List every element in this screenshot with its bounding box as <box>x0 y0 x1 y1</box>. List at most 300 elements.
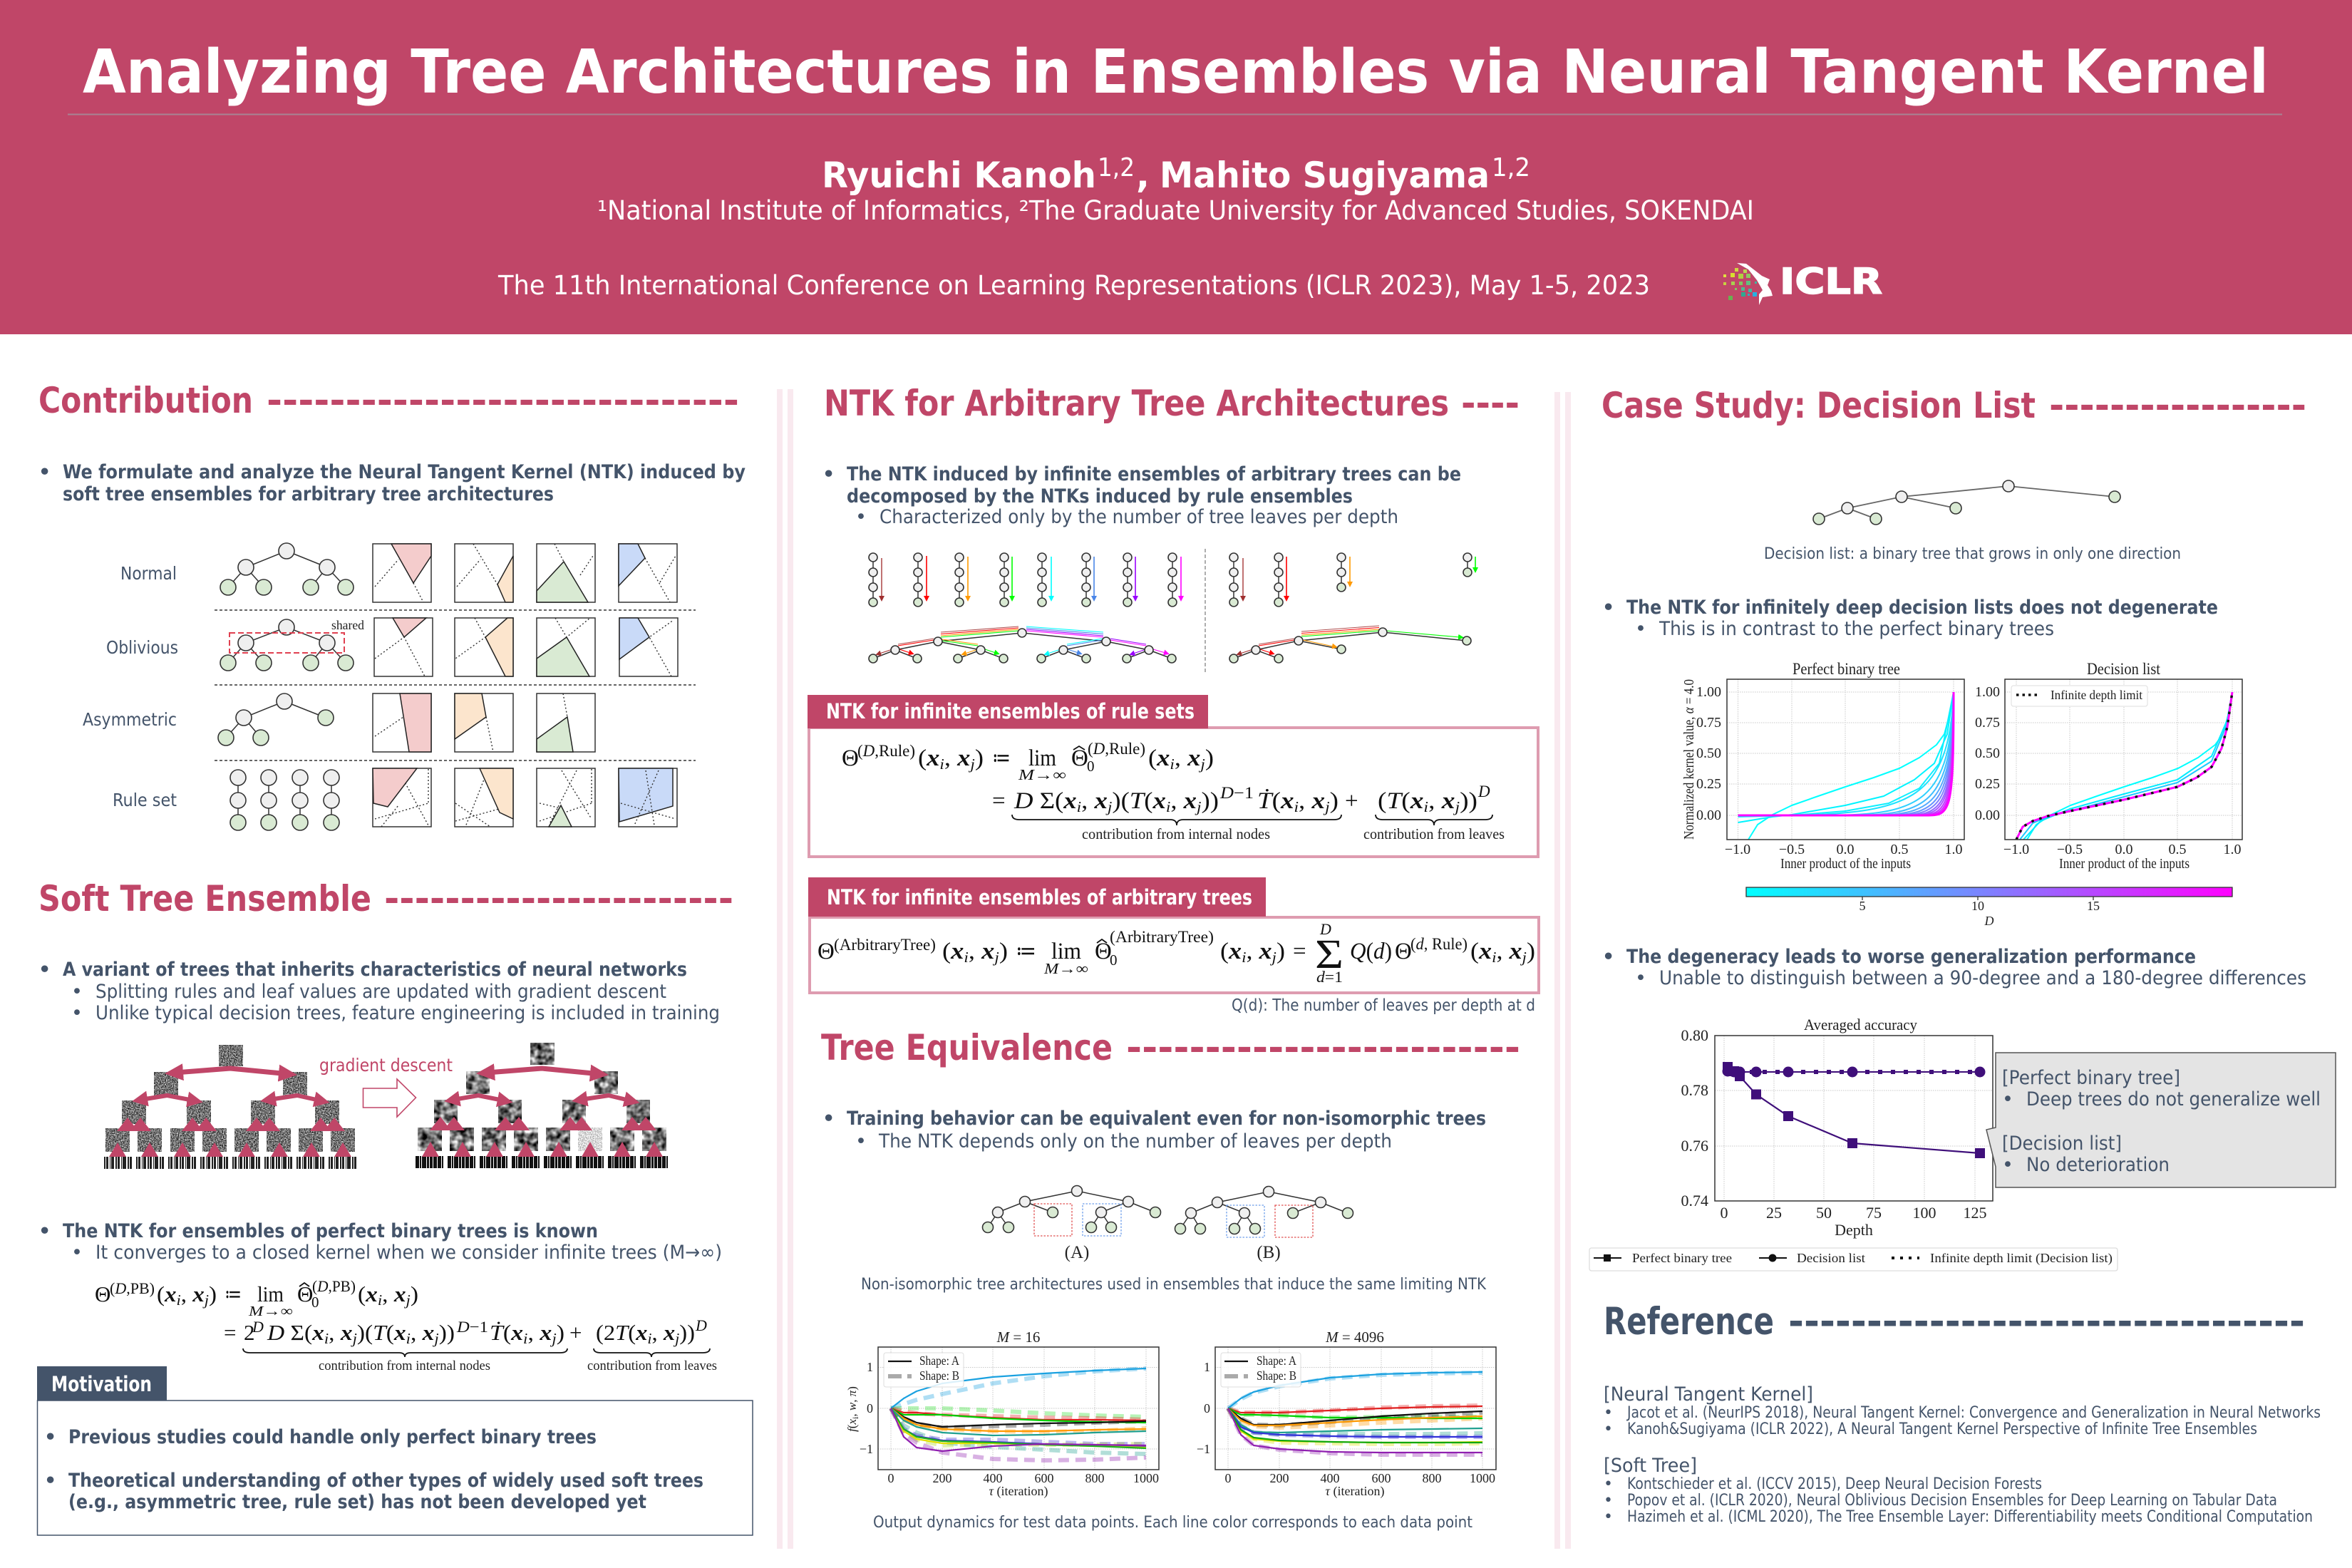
contribution statement <box>38 461 746 505</box>
chart: output dynamics M=4096: 600 <box>1371 1471 1391 1485</box>
formula: arbitrary tree NTK: i <box>1492 949 1497 966</box>
chart: output dynamics M=16: , <box>845 1410 859 1417</box>
formula: arbitrary tree NTK: = <box>1293 939 1306 964</box>
formula: rule set NTK: )) <box>1460 788 1477 814</box>
formula: arbitrary tree NTK: Θ <box>1095 939 1112 964</box>
authors: 1,2 <box>1098 153 1135 182</box>
formula: arbitrary tree NTK: 0 <box>1110 951 1118 969</box>
chart: averaged accuracy: 0.76 <box>1681 1137 1708 1155</box>
formula: rule set NTK: 0 <box>1087 758 1095 775</box>
chart: decision list kernel: Infinite depth limit <box>2051 688 2142 702</box>
affiliations: ¹National Institute of Informatics, ²The Graduate University for Advanced Studies, SOKENDAI <box>597 195 1754 226</box>
chart: decision list kernel: 0.0 <box>2115 842 2132 857</box>
chart: output dynamics M=16: M = 16 <box>996 1329 1040 1346</box>
header banner <box>0 0 2352 334</box>
formula: arbitrary tree NTK: j <box>1269 949 1276 966</box>
chart: averaged accuracy: 0.74 <box>1681 1192 1708 1209</box>
formula: rule set NTK: j <box>1323 798 1330 815</box>
chart: output dynamics M=4096: 400 <box>1320 1471 1340 1485</box>
chart: averaged accuracy: 125 <box>1963 1204 1987 1222</box>
formula: perfect binary tree NTK: M→∞ <box>248 1304 293 1319</box>
formula: arbitrary tree NTK: Σ <box>1315 931 1343 977</box>
formula: arbitrary tree NTK <box>817 920 1535 986</box>
bullets: decomposition: The NTK induced by infinite ensembles of arbitrary trees can be <box>847 463 1461 485</box>
contribution statement: • <box>38 461 51 483</box>
formula: rule set NTK: (D,Rule) <box>1088 740 1145 758</box>
figure: tree types and partitions: Asymmetric <box>83 709 177 730</box>
formula: perfect binary tree NTK: Ṫ(x <box>490 1320 522 1345</box>
heading: contribution <box>38 380 739 421</box>
formula: arbitrary tree NTK: i <box>1242 949 1247 966</box>
formula: rule set NTK: + <box>1345 788 1358 814</box>
tab: arbitrary trees: NTK for infinite ensembles of arbitrary trees <box>827 885 1252 909</box>
formula: arbitrary tree NTK: ) <box>999 939 1008 964</box>
contribution statement: We formulate and analyze the Neural Tangent Kernel (NTK) induced by <box>63 461 746 483</box>
formula: rule set NTK: (x <box>918 746 939 771</box>
formula: rule set NTK: x <box>1441 788 1455 814</box>
formula: rule set NTK: j <box>1195 798 1202 815</box>
chart: output dynamics M=16 <box>845 1329 1159 1499</box>
formula: perfect binary tree NTK: D Σ(x <box>267 1320 324 1345</box>
partitions: asymmetric row <box>373 693 595 752</box>
formula: rule set NTK: , <box>1170 788 1184 814</box>
tree: asymmetric <box>218 693 334 746</box>
colorbar: depth D: 10 <box>1971 899 1984 913</box>
panel: contribution <box>38 380 746 830</box>
heading: tree equivalence: ------------------------- <box>1126 1027 1520 1068</box>
formula: perfect binary tree NTK: + <box>569 1320 582 1345</box>
formula: perfect binary tree NTK: j <box>350 1330 357 1347</box>
references: neural tangent kernel <box>1604 1383 2321 1438</box>
formula: perfect binary tree NTK: )) <box>679 1320 695 1345</box>
formula: rule set NTK: i <box>1170 755 1175 773</box>
motivation bullets: Theoretical understanding of other types of widely used soft trees <box>68 1470 703 1492</box>
rule chains: decision list <box>1229 553 1475 607</box>
legend: accuracy chart <box>1589 1248 2118 1271</box>
chart: perfect binary tree kernel: −0.5 <box>1779 842 1805 857</box>
tree: oblivious: shared <box>331 618 364 632</box>
formula: arbitrary tree NTK: Q(d) <box>1350 939 1392 964</box>
formula: perfect binary tree NTK <box>95 1277 717 1373</box>
chart: decision list kernel: −0.5 <box>2057 842 2083 857</box>
chart: output dynamics M=4096: Shape: B <box>1257 1368 1296 1383</box>
formula: perfect binary tree NTK: 2 <box>244 1320 255 1345</box>
formula: perfect binary tree NTK: , <box>329 1320 341 1345</box>
formula: rule set NTK: Ṫ(x <box>1257 788 1292 814</box>
chart: averaged accuracy: Depth <box>1835 1221 1873 1239</box>
formula: perfect binary tree NTK: )( <box>357 1320 373 1345</box>
chart: output dynamics M=4096: M = 4096 <box>1325 1329 1384 1346</box>
bullets: soft tree definition: A variant of trees that inherits characteristics of neural networks <box>63 959 687 981</box>
chart: output dynamics M=16: τ (iteration) <box>989 1484 1048 1499</box>
formula: arbitrary tree NTK: (d, Rule) <box>1410 935 1468 953</box>
panel: NTK for arbitrary tree architectures <box>808 383 1539 1015</box>
formula: perfect binary tree NTK: j <box>432 1330 439 1347</box>
formula: arbitrary tree NTK: x <box>981 939 994 964</box>
chart: averaged accuracy: 0 <box>1721 1204 1728 1222</box>
formula: rule set NTK: contribution from leaves <box>1363 825 1505 842</box>
formula: rule set NTK: ) <box>975 746 984 771</box>
formula: perfect binary tree NTK: Θ <box>297 1281 313 1306</box>
chart: perfect binary tree kernel: 0.25 <box>1696 776 1721 792</box>
authors: Ryuichi Kanoh <box>822 155 1096 196</box>
chart: averaged accuracy: 25 <box>1766 1204 1782 1222</box>
bullets: known NTK <box>38 1220 722 1264</box>
formula: rule set NTK: x <box>1183 788 1197 814</box>
chart: output dynamics M=16: 800 <box>1085 1471 1105 1485</box>
formula: perfect binary tree NTK: (D,PB) <box>312 1277 356 1295</box>
formula: arbitrary tree NTK: x <box>1258 939 1272 964</box>
chart: output dynamics M=16: Shape: A <box>919 1353 959 1368</box>
formula: rule set NTK: j <box>1453 798 1460 815</box>
motivation bullets: (e.g., asymmetric tree, rule set) has not been developed yet <box>68 1491 646 1513</box>
chart: averaged accuracy: 100 <box>1913 1204 1936 1222</box>
formula: rule set NTK: (T(x <box>1378 788 1422 814</box>
bullets: known NTK: It converges to a closed kernel when we consider infinite trees (M→∞) <box>96 1242 722 1264</box>
chart: perfect binary tree kernel: 1.00 <box>1696 684 1721 700</box>
panel: motivation <box>37 1366 753 1535</box>
chart: output dynamics M=4096: −1 <box>1197 1442 1210 1456</box>
formula: perfect binary tree NTK: , <box>652 1320 664 1345</box>
formula: arbitrary tree NTK: (ArbitraryTree) <box>834 936 936 954</box>
figure: tree A <box>982 1186 1160 1262</box>
formula: rule set NTK: i <box>1294 798 1299 815</box>
heading: tree equivalence: Tree Equivalence <box>821 1027 1113 1068</box>
conference line: The 11th International Conference on Learning Representations (ICLR 2023), May 1-5, 2023 <box>497 270 1650 301</box>
chart: averaged accuracy: 0.78 <box>1681 1081 1708 1099</box>
references: neural tangent kernel: • <box>1604 1420 1613 1438</box>
heading: contribution: Contribution <box>38 380 253 421</box>
caption: decision list: Decision list: a binary tree that grows in only one direction <box>1764 545 2181 563</box>
bullets: soft tree definition <box>38 959 720 1024</box>
figure: random tree filters before training <box>104 1045 357 1163</box>
chart: output dynamics M=4096 <box>1197 1329 1496 1499</box>
chart: output dynamics M=4096: 1 <box>1204 1360 1210 1374</box>
bullets: generalization: Unable to distinguish between a 90-degree and a 180-degree differences <box>1659 967 2306 989</box>
formula: perfect binary tree NTK: contribution from internal nodes <box>319 1358 490 1373</box>
caption: output dynamics: Output dynamics for test data points. Each line color corresponds to each data point <box>873 1514 1472 1532</box>
chart: decision list kernel <box>1975 660 2242 872</box>
bullets: soft tree definition: Splitting rules and leaf values are updated with gradient descent <box>96 981 666 1003</box>
formula: perfect binary tree NTK: 0 <box>311 1294 319 1311</box>
formula: perfect binary tree NTK: D−1 <box>456 1318 488 1336</box>
chart: decision list kernel: 1.0 <box>2224 842 2241 857</box>
bullets: equivalence: • <box>855 1130 867 1152</box>
heading: soft tree ensemble <box>38 878 733 919</box>
panel: NTK for arbitrary trees <box>808 877 1539 1015</box>
chart: perfect binary tree kernel: Inner product of the inputs <box>1780 856 1911 872</box>
authors: Mahito Sugiyama <box>1160 155 1490 196</box>
partitions: rule set row <box>373 768 677 827</box>
formula: perfect binary tree NTK: ) <box>209 1281 217 1306</box>
formula: rule set NTK: D Σ(x <box>1014 788 1076 814</box>
formula: perfect binary tree NTK: , <box>527 1320 540 1345</box>
references: soft tree <box>1604 1455 2313 1526</box>
bullets: no degeneration: • <box>1602 597 1614 619</box>
authors: 1,2 <box>1492 153 1530 182</box>
formula: arbitrary tree NTK: x <box>1508 939 1522 964</box>
chart: perfect binary tree kernel: −1.0 <box>1725 842 1750 857</box>
chart: output dynamics M=16: 1000 <box>1133 1471 1159 1485</box>
bullets: soft tree definition: • <box>71 981 83 1003</box>
references: soft tree: [Soft Tree] <box>1604 1455 1697 1477</box>
formula: rule set NTK: ) <box>1205 746 1214 771</box>
panel: NTK for rule sets <box>808 695 1538 857</box>
formula: perfect binary tree NTK: , <box>382 1281 394 1306</box>
figure: tree B <box>1175 1186 1353 1262</box>
tab: rule sets: NTK for infinite ensembles of rule sets <box>826 699 1195 723</box>
panel: reference <box>1604 1300 2321 1526</box>
formula: arbitrary tree NTK: i <box>964 949 969 966</box>
chart: averaged accuracy: Averaged accuracy <box>1804 1016 1917 1033</box>
figure: tree A: (A) <box>1065 1243 1089 1262</box>
callout: accuracy interpretation: • <box>2002 1088 2013 1110</box>
chart: output dynamics M=16: 0 <box>888 1471 894 1485</box>
formula: arbitrary tree NTK: ≔ <box>1016 939 1036 964</box>
formula: rule set NTK: x <box>1093 788 1108 814</box>
formula: perfect binary tree NTK: j <box>673 1330 679 1347</box>
formula: perfect binary tree NTK: lim <box>257 1281 284 1306</box>
chart: decision list kernel: 1.00 <box>1975 684 2000 700</box>
bullets: known NTK: The NTK for ensembles of perfect binary trees is known <box>63 1220 598 1242</box>
formula: arbitrary tree NTK: j <box>992 949 999 966</box>
bullets: decomposition: Characterized only by the number of tree leaves per depth <box>880 506 1398 528</box>
panel: tree equivalence <box>821 1027 1520 1532</box>
bullets: generalization: • <box>1635 967 1646 989</box>
bullets: no degeneration <box>1602 597 2218 640</box>
arrow: training direction <box>363 1079 416 1117</box>
chart: output dynamics M=4096: 800 <box>1423 1471 1441 1485</box>
formula: perfect binary tree NTK: j <box>550 1330 557 1347</box>
heading: contribution: ------------------------------ <box>267 380 739 421</box>
tab: arbitrary trees <box>808 877 1266 917</box>
formula: perfect binary tree NTK: x <box>340 1320 353 1345</box>
formula: arbitrary tree NTK: D <box>1319 920 1331 938</box>
chart: decision list kernel: 0.5 <box>2168 842 2187 857</box>
authors <box>822 153 1530 196</box>
chart: output dynamics M=16: w, π) <box>845 1386 859 1410</box>
references: soft tree: Kontschieder et al. (ICCV 2015), Deep Neural Decision Forests <box>1627 1475 2042 1493</box>
chart: output dynamics M=4096: 200 <box>1270 1471 1289 1485</box>
motivation bullets: • <box>44 1470 56 1492</box>
formula: rule set NTK: D−1 <box>1219 784 1254 802</box>
formula: rule set NTK: , <box>1081 788 1095 814</box>
chart: averaged accuracy: 50 <box>1816 1204 1832 1222</box>
chart: output dynamics M=4096: Shape: A <box>1257 1353 1296 1368</box>
bullets: equivalence: The NTK depends only on the number of leaves per depth <box>878 1130 1392 1152</box>
motivation bullets: • <box>44 1426 56 1448</box>
formula: rule set NTK: contribution from internal nodes <box>1082 825 1270 842</box>
formula: rule set NTK: (D,Rule) <box>857 742 915 760</box>
chart: output dynamics M=16: 1 <box>867 1360 873 1374</box>
callout: accuracy interpretation: [Perfect binary tree] <box>2002 1067 2180 1089</box>
formula: rule set NTK: (x <box>1148 746 1169 771</box>
tree: rule set <box>230 770 339 830</box>
formula: arbitrary tree NTK: d=1 <box>1316 968 1343 986</box>
panel: case study decision list <box>1589 385 2336 1271</box>
colorbar: depth D: 15 <box>2087 899 2100 913</box>
chart: decision list kernel: Decision list <box>2087 660 2161 678</box>
chart: output dynamics M=16: 400 <box>984 1471 1002 1485</box>
note: Q(d): Q(d): The number of leaves per depth at d <box>1232 996 1535 1015</box>
formula: arbitrary tree NTK: Θ <box>817 939 835 964</box>
chart: perfect binary tree kernel: 1.0 <box>1944 842 1963 857</box>
motivation bullets: Previous studies could handle only perfect binary trees <box>68 1426 597 1448</box>
formula: rule set NTK: T(x <box>1130 788 1165 814</box>
bullets: generalization: • <box>1602 946 1614 968</box>
label: gradient descent: gradient descent <box>319 1055 453 1076</box>
chart: decision list kernel: 0.75 <box>1975 715 2000 731</box>
formula: perfect binary tree NTK: ≔ <box>225 1281 242 1306</box>
heading: case study: ----------------- <box>2049 385 2306 426</box>
formula: rule set NTK: , <box>1299 788 1312 814</box>
chart: averaged accuracy: 0.80 <box>1681 1026 1708 1044</box>
formula: arbitrary tree NTK: (x <box>1470 939 1491 964</box>
formula: perfect binary tree NTK: , <box>411 1320 423 1345</box>
figure: tree types and partitions <box>83 543 696 830</box>
motivation tab <box>37 1366 167 1401</box>
chart: averaged accuracy: 75 <box>1866 1204 1882 1222</box>
formula: perfect binary tree NTK: T(x <box>373 1320 405 1345</box>
chart: output dynamics M=4096: τ (iteration) <box>1326 1484 1384 1499</box>
formula: arbitrary tree NTK: j <box>1520 949 1527 966</box>
formula: rule set NTK: x <box>1187 746 1200 771</box>
formula: rule set NTK: Θ <box>842 746 859 771</box>
formula: perfect binary tree NTK: x <box>663 1320 675 1345</box>
chart: perfect binary tree kernel: Perfect binary tree <box>1793 660 1900 678</box>
caption: non-isomorphic trees: Non-isomorphic tree architectures used in ensembles that induce the same limiting NTK <box>861 1276 1487 1294</box>
bullets: soft tree definition: Unlike typical decision trees, feature engineering is included in training <box>96 1002 720 1024</box>
bullets: decomposition: • <box>822 463 835 485</box>
callout: accuracy interpretation: No deterioration <box>2026 1154 2170 1176</box>
callout: accuracy interpretation: • <box>2002 1154 2013 1176</box>
formula: perfect binary tree NTK: D <box>695 1316 707 1334</box>
decision list tree with coloured paths <box>1229 626 1471 663</box>
formula: rule set NTK: j <box>1105 798 1113 815</box>
figure: tree types and partitions: Oblivious <box>106 637 178 658</box>
chart: output dynamics M=4096: 0 <box>1224 1471 1232 1485</box>
chart: decision list kernel: 0.00 <box>1975 808 2000 823</box>
legend: accuracy chart: Decision list <box>1797 1251 1865 1265</box>
formula: rule set NTK: , <box>1428 788 1442 814</box>
formula: perfect binary tree NTK: (x <box>358 1281 377 1306</box>
tree: oblivious <box>220 618 364 671</box>
formula: rule set NTK: x <box>956 746 970 771</box>
formula: rule set NTK: )( <box>1112 788 1130 814</box>
figure: tree types and partitions: Normal <box>120 563 177 584</box>
formula: rule set NTK: Θ <box>1071 746 1088 771</box>
bullets: generalization: The degeneracy leads to worse generalization performance <box>1626 946 2196 968</box>
chart: perfect binary tree kernel: 0.0 <box>1836 842 1855 857</box>
panel: soft tree ensemble <box>37 878 753 1535</box>
callout: accuracy interpretation: [Decision list] <box>2002 1133 2122 1155</box>
contribution statement: soft tree ensembles for arbitrary tree architectures <box>63 483 554 505</box>
formula: arbitrary tree NTK: (ArbitraryTree) <box>1110 928 1214 946</box>
chart: perfect binary tree kernel: 0.00 <box>1696 808 1721 823</box>
formula: rule set NTK: j <box>968 755 975 773</box>
formula: arbitrary tree NTK: ) <box>1276 939 1285 964</box>
icon: ICLR logo: ICLR <box>1780 261 1882 302</box>
authors: , <box>1136 155 1150 196</box>
formula: perfect binary tree NTK: x <box>539 1320 552 1345</box>
bullets: known NTK: • <box>38 1220 51 1242</box>
chart: output dynamics M=16: i <box>850 1416 860 1419</box>
formula: arbitrary tree NTK: M→∞ <box>1043 960 1088 977</box>
formula: perfect binary tree NTK: i <box>523 1330 528 1347</box>
chart: output dynamics M=16: 0 <box>867 1401 873 1415</box>
chart: output dynamics M=4096: 0 <box>1204 1401 1210 1415</box>
figure: decision list tree <box>1813 480 2120 525</box>
bullets: soft tree definition: • <box>71 1002 83 1024</box>
heading: NTK for arbitrary trees: ---- <box>1461 383 1520 424</box>
chart: decision list kernel: Inner product of the inputs <box>2059 856 2189 872</box>
heading: case study: Case Study: Decision List <box>1601 385 2036 426</box>
references: soft tree: • <box>1604 1475 1613 1493</box>
chart: output dynamics M=16: −1 <box>860 1442 873 1456</box>
tab: rule sets <box>808 695 1208 728</box>
formula: arbitrary tree NTK: (x <box>1220 939 1241 964</box>
references: soft tree: • <box>1604 1492 1613 1510</box>
formula: perfect binary tree NTK: x <box>422 1320 434 1345</box>
chart: perfect binary tree kernel: 0.5 <box>1890 842 1909 857</box>
formula: arbitrary tree NTK: (x <box>942 939 963 964</box>
perfect binary tree with coloured paths <box>869 626 1176 663</box>
formula: rule set NTK: , <box>944 746 957 771</box>
figure: tree types and partitions: Rule set <box>113 790 177 810</box>
formula: rule set NTK: lim <box>1028 746 1056 771</box>
formula: rule set NTK: i <box>1423 798 1428 815</box>
formula: perfect binary tree NTK: (x <box>157 1281 176 1306</box>
bullets: no degeneration: This is in contrast to the perfect binary trees <box>1659 618 2054 640</box>
chart: output dynamics M=16: f(x <box>845 1419 859 1432</box>
formula: perfect binary tree NTK: i <box>324 1330 329 1347</box>
figure: tree B: (B) <box>1257 1243 1281 1262</box>
bullets: generalization <box>1602 946 2306 989</box>
chart: output dynamics M=16: Shape: B <box>919 1368 959 1383</box>
chart: output dynamics M=4096: 1000 <box>1470 1471 1495 1485</box>
references: neural tangent kernel: • <box>1604 1404 1613 1422</box>
formula: perfect binary tree NTK: x <box>192 1281 205 1306</box>
formula: perfect binary tree NTK: (2T(x <box>596 1320 647 1345</box>
figure: learned tree filters after training <box>416 1043 669 1162</box>
formula: perfect binary tree NTK: ) <box>411 1281 418 1306</box>
bullets: decomposition <box>822 463 1461 528</box>
formula: rule set NTK: ≔ <box>992 746 1011 771</box>
chart: perfect binary tree kernel: 0.50 <box>1696 746 1721 761</box>
formula: rule set NTK: i <box>939 755 944 773</box>
references: neural tangent kernel: Kanoh&Sugiyama (ICLR 2022), A Neural Tangent Kernel Perspective of Infinite Tree Ensembles <box>1627 1420 2257 1438</box>
formula: rule set NTK: ) <box>1330 788 1339 814</box>
formula: rule set NTK: j <box>1198 755 1205 773</box>
chart: perfect binary tree kernel: Normalized kernel value, α = 4.0 <box>1681 679 1697 840</box>
tree: normal <box>220 543 354 595</box>
chart: output dynamics M=16: 600 <box>1035 1471 1053 1485</box>
formula: rule set NTK: i <box>1077 798 1081 815</box>
heading: soft tree ensemble: ----------------------- <box>384 878 733 919</box>
bullets: known NTK: • <box>71 1242 83 1264</box>
colorbar: depth D: D <box>1984 914 1994 928</box>
chart: decision list kernel: −1.0 <box>2003 842 2029 857</box>
formula: rule set NTK: )) <box>1202 788 1219 814</box>
references: soft tree: • <box>1604 1508 1613 1526</box>
bullets: equivalence: • <box>822 1108 835 1130</box>
heading: tree equivalence <box>821 1027 1520 1068</box>
formula: perfect binary tree NTK: j <box>202 1291 209 1309</box>
chart: decision list kernel: 0.50 <box>1975 746 2000 761</box>
callout: accuracy interpretation <box>1986 1053 2336 1187</box>
chart: perfect binary tree kernel <box>1681 660 1964 872</box>
formula: arbitrary tree NTK: lim <box>1051 939 1081 964</box>
